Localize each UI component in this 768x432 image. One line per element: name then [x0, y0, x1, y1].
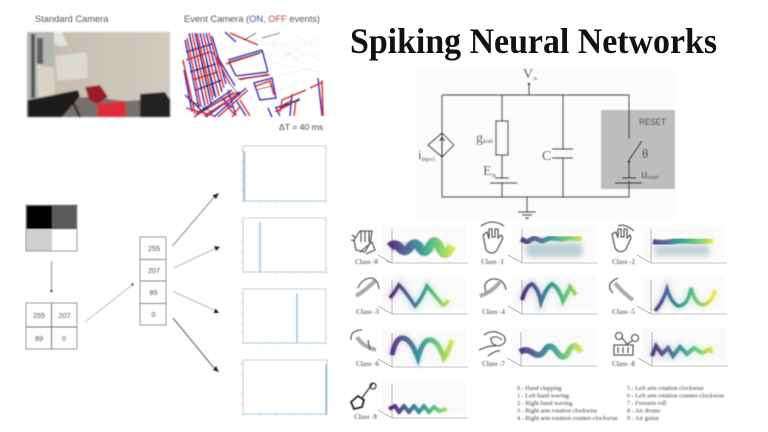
icon: clapping hands [351, 231, 375, 254]
class labels: Class -0 [355, 259, 378, 266]
pixel value grid: 0 [62, 334, 66, 343]
value column: 207 [148, 266, 160, 275]
arrow: to chart 1 [172, 193, 219, 246]
chart 2 [241, 218, 326, 274]
pixel value grid [26, 303, 77, 349]
pixel value grid: 207 [58, 311, 70, 320]
title: Spiking Neural Networks [350, 21, 717, 61]
panel: pixel to spike encoding [26, 146, 327, 416]
event frame [183, 32, 324, 117]
value column: 0 [152, 310, 156, 319]
legend: class names: 0 - Hand clapping [517, 385, 562, 392]
label: delta T: ΔT = 40 ms [279, 122, 323, 132]
reset box [601, 110, 675, 189]
legend: class names: 7 - Forearm roll [627, 400, 667, 407]
plot: class 4 [508, 276, 598, 314]
plot: class 5 [637, 276, 727, 314]
plot: class 8 [638, 328, 728, 366]
icon: arm rotation 5 [609, 278, 633, 300]
pixel value grid: 89 [35, 334, 43, 343]
circuit diagram [417, 67, 675, 218]
panel: standard camera [27, 14, 170, 117]
label: i inject: inject [422, 157, 435, 163]
class labels: Class -7 [482, 361, 505, 368]
plot: class 2 [637, 225, 727, 263]
class labels: Class -9 [354, 414, 377, 421]
class labels: Class -4 [482, 309, 505, 316]
label: Em: E [483, 164, 492, 179]
label: Em: m [492, 173, 497, 179]
icon: air guitar [351, 383, 376, 409]
arrow: down [50, 261, 53, 292]
grayscale image grid [26, 205, 77, 251]
legend: class names: 6 - Left arm rotation counter-clockwise [627, 392, 725, 400]
class labels: Class -8 [612, 361, 635, 368]
value column [140, 237, 166, 325]
icons: gestures [351, 222, 638, 409]
icon: arm rotation 4 [480, 279, 506, 296]
legend: class names: 9 - Air guitar [627, 415, 659, 422]
pixel value grid: 255 [33, 311, 45, 320]
class labels [354, 259, 635, 421]
icon: air drums [614, 332, 638, 355]
class labels: Class -5 [612, 309, 635, 316]
class labels: Class -1 [481, 259, 504, 266]
label: Vm: m [533, 77, 537, 82]
photo: office room [27, 32, 170, 117]
arrow: to chart 2 [174, 246, 220, 268]
chart 3 [241, 289, 326, 344]
plot: class 7 [507, 328, 597, 366]
icon: hand wave left [481, 222, 504, 253]
plot: class 9 [378, 380, 468, 418]
heading: event camera: Event Camera (ON, OFF events) [184, 14, 320, 24]
panel: event camera [183, 14, 324, 132]
label: u reset: u [641, 166, 648, 181]
chart 4 [241, 360, 327, 416]
arrow: grid to column [85, 283, 134, 322]
class labels: Class -6 [356, 361, 379, 368]
legend: class names: 1 - Left hand waving [517, 392, 569, 400]
value column: 89 [150, 288, 158, 297]
legend: class names: 8 - Air drums [627, 408, 661, 414]
class labels: Class -3 [356, 309, 379, 316]
icon: forearm roll [479, 332, 505, 356]
legend: class names [517, 385, 725, 422]
arrow: to chart 4 [173, 318, 219, 372]
label: g leak: g [476, 131, 483, 146]
icon: arm rotation 3 [356, 278, 379, 296]
label: u reset: reset [648, 175, 659, 181]
plot: class 0 [378, 225, 468, 263]
value column: 255 [148, 244, 160, 253]
plot: class 3 [378, 276, 468, 314]
legend: class names: 5 - Left arm rotation clockwise [627, 385, 704, 392]
plot: class 6 [378, 329, 468, 367]
label: Vm: V [523, 67, 533, 82]
class labels: Class -2 [612, 259, 635, 266]
label: RESET: RESET [639, 117, 666, 127]
label: theta: θ [642, 146, 648, 161]
label: g leak: leak [483, 139, 493, 145]
label: i inject: i [418, 147, 422, 162]
plot: class 1 [508, 225, 598, 263]
legend: class names: 4 - Right arm rotation counter-clockwise [517, 415, 618, 422]
arrow: to chart 3 [173, 292, 219, 313]
label: C: C [542, 149, 551, 164]
icon: hand wave right [612, 225, 634, 252]
legend: class names: 2 - Right hand waving [517, 400, 572, 407]
legend: class names: 3 - Right arm rotation clockwise [517, 408, 598, 414]
heading: standard camera: Standard Camera [35, 14, 109, 24]
panel: gesture classes [351, 222, 728, 422]
icon: arm rotation 6 [351, 330, 376, 350]
chart 1 [241, 146, 326, 202]
